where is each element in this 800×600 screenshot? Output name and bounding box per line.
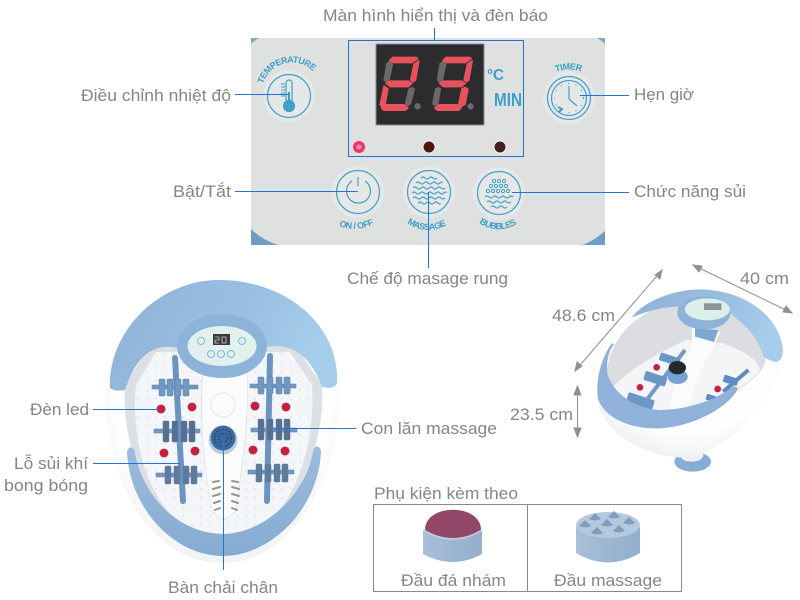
back rim (632, 289, 783, 362)
label: foot brush: Bàn chải chân (168, 578, 278, 597)
label: 23.5 cm: 23.5 cm (510, 405, 573, 424)
label: TEMPERATURE: TEMPERATURE (257, 56, 317, 82)
button: temperature (263, 70, 315, 122)
label: LED: Đèn led (30, 400, 89, 419)
vents (213, 481, 239, 510)
dimension arrow: depth (575, 270, 662, 371)
rails (175, 356, 270, 501)
mini panel (677, 296, 731, 329)
stand foot (674, 448, 711, 472)
unit labels (487, 67, 522, 110)
callout lines (93, 28, 629, 570)
tub interior wall (607, 303, 766, 410)
button: on/off (332, 166, 384, 218)
heading: accessories: Phụ kiện kèm theo (374, 484, 518, 503)
center ridge (668, 325, 720, 412)
unit labels: °C (487, 67, 504, 84)
display screen (376, 44, 484, 125)
label: bubble holes (4, 454, 88, 495)
product: foot bath top view (106, 280, 340, 563)
brush (208, 426, 238, 454)
panel: control panel photo (251, 38, 605, 245)
accessory: massage head (576, 511, 640, 562)
button: timer (543, 72, 595, 124)
dimension arrow: height (574, 386, 581, 437)
label: 48.6 cm: 48.6 cm (552, 306, 615, 325)
label: bubble holes: Lỗ sủi khí (14, 454, 88, 473)
mini control panel (177, 314, 267, 378)
tub floor (613, 340, 760, 410)
panel: accessories table (374, 504, 682, 592)
heading: display and lights: Màn hình hiển thị và đèn báo (323, 6, 548, 25)
caption: massage head: Đầu massage (554, 571, 662, 590)
product: foot bath angled view (597, 289, 783, 472)
center ridge (201, 372, 248, 519)
left rollers (626, 350, 685, 411)
label: BUBBLES: BUBBLES (480, 218, 516, 230)
white body (597, 289, 782, 457)
right rollers (705, 370, 748, 403)
button: bubbles (473, 167, 525, 219)
red bubble holes (156, 401, 291, 458)
button: massage (403, 166, 455, 218)
label: power: Bật/Tắt (173, 182, 231, 201)
label: bubbles function: Chức năng sủi (634, 182, 746, 201)
unit labels: MIN (494, 90, 522, 110)
rollers (152, 377, 297, 484)
indicator lights (353, 141, 506, 153)
bottom blue band (127, 446, 321, 556)
top blue cap (110, 280, 337, 391)
callout box: display and indicators (348, 40, 524, 156)
label: ON / OFF: ON / OFF (340, 218, 373, 229)
accessory: pumice head (423, 510, 482, 562)
pillar (695, 328, 718, 342)
label: vibration massage: Chế độ masage rung (347, 269, 508, 288)
caption: pumice head: Đầu đá nhám (401, 571, 506, 590)
front rim (597, 343, 738, 428)
label: bubble holes: bong bóng (4, 476, 88, 495)
dimension arrow: width (693, 265, 792, 313)
label: MASSAGE: MASSAGE (408, 218, 446, 230)
label: 40 cm: 40 cm (740, 269, 789, 288)
brush (668, 361, 688, 384)
label: rollers: Con lăn massage (361, 419, 497, 438)
label: temperature adjust: Điều chỉnh nhiệt độ (81, 86, 231, 105)
red holes (636, 364, 721, 393)
label: TIMER: TIMER (554, 63, 582, 72)
label: timer: Hẹn giờ (634, 85, 694, 104)
